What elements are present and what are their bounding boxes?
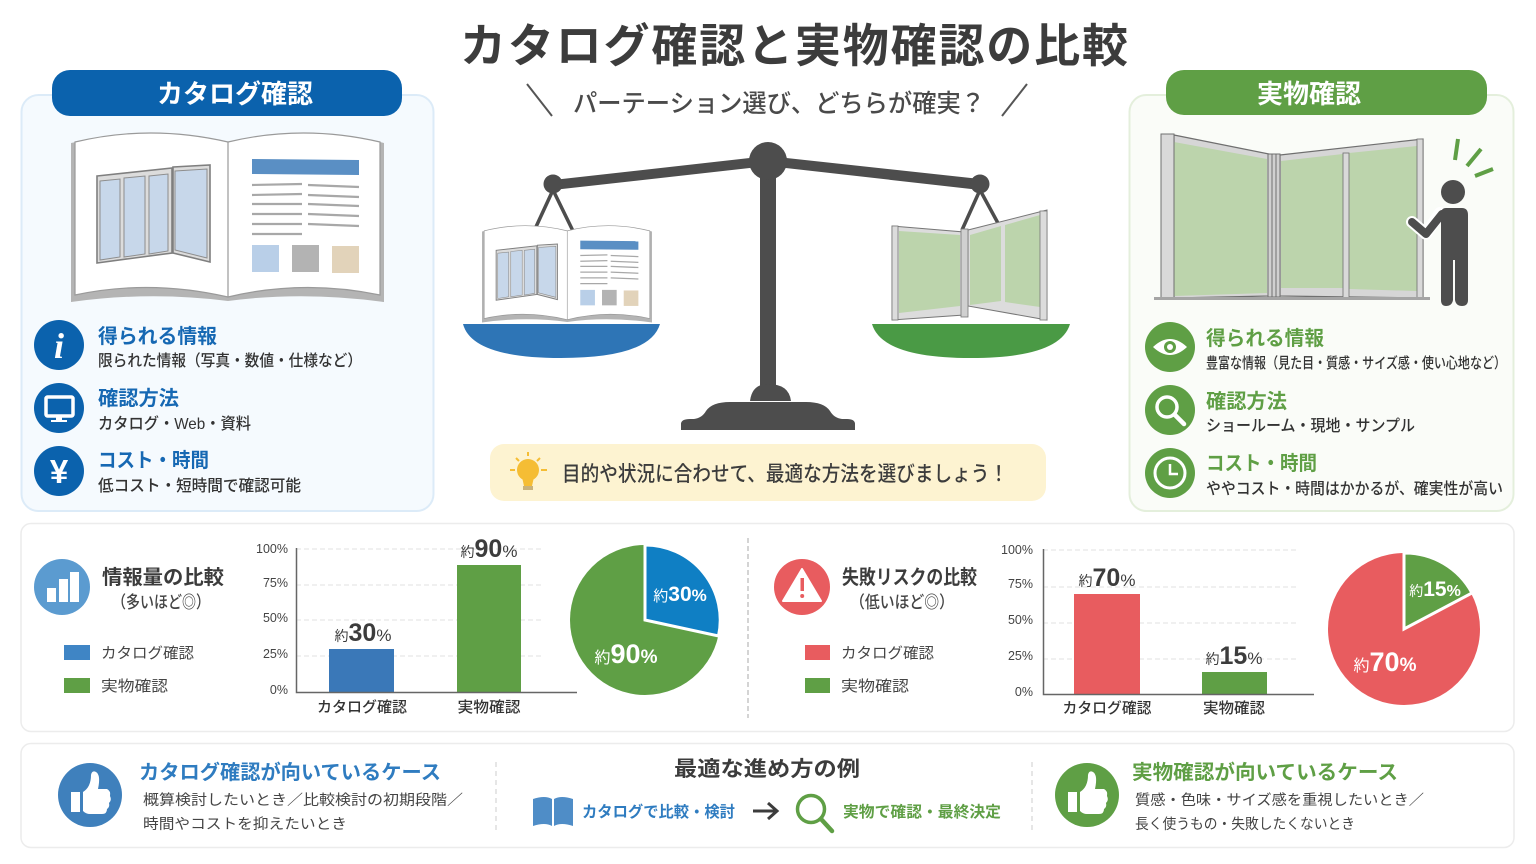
row: catalog cost: ¥: [50, 453, 69, 490]
row: physical method: ショールーム・現地・サンプル: [1206, 417, 1415, 435]
row: physical cost: コスト・時間: [1206, 452, 1317, 475]
pie chart: failure risk: 約15%: [1409, 578, 1461, 601]
bar chart: failure risk: カタログ確認: [1062, 700, 1152, 717]
subtitle with slashes: パーテーション選び、どちらが確実？: [573, 90, 985, 118]
row: catalog information: i: [54, 326, 64, 366]
bar chart: information amount: 75%: [263, 576, 288, 590]
pie chart: failure risk: [1328, 553, 1480, 705]
case: optimal process: カタログで比較・検討: [582, 802, 735, 821]
bar chart: failure risk: 実物確認: [1203, 700, 1265, 717]
heading: failure risk: （低いほど◎）: [850, 593, 954, 612]
bar chart: information amount: カタログ確認: [317, 699, 407, 716]
pie chart: information amount: 約30%: [653, 583, 707, 606]
bar chart: failure risk: 100%: [1001, 543, 1033, 557]
heading: information amount: [34, 559, 224, 615]
row: catalog method: カタログ・Web・資料: [98, 415, 251, 433]
bar chart: failure risk: [1001, 543, 1314, 717]
legend: failure risk: 実物確認: [841, 678, 909, 695]
bar chart: failure risk: 50%: [1008, 613, 1033, 627]
row: physical information: [1145, 322, 1506, 372]
panel: catalog check: [22, 70, 434, 511]
case: catalog: カタログ確認が向いているケース: [139, 760, 441, 784]
legend: information amount: カタログ確認: [101, 645, 194, 662]
tip banner: [490, 444, 1046, 501]
bar chart: failure risk: 25%: [1008, 649, 1033, 663]
bar chart: information amount: 約90%: [461, 535, 517, 563]
tip banner: 目的や状況に合わせて、最適な方法を選びましょう！: [562, 463, 1008, 486]
scale hangers: [535, 190, 999, 231]
bar chart: failure risk: 75%: [1008, 577, 1033, 591]
bar chart: failure risk: 0%: [1015, 685, 1033, 699]
case: physical: [1055, 760, 1424, 833]
case: optimal process: 最適な進め方の例: [674, 758, 860, 781]
row: physical cost: [1145, 448, 1503, 498]
case: optimal process: [533, 758, 1001, 831]
panel: comparison charts: [21, 524, 1514, 732]
bar chart: information amount: 約30%: [335, 619, 391, 647]
case: catalog: [58, 760, 463, 833]
pie chart: information amount: [570, 545, 720, 695]
left pan with catalog: [463, 226, 660, 358]
row: physical information: 得られる情報: [1206, 327, 1324, 350]
arrow: [753, 803, 777, 819]
row: catalog cost: 低コスト・短時間で確認可能: [98, 477, 301, 495]
case: catalog: 概算検討したいとき／比較検討の初期段階／: [143, 792, 463, 809]
title: カタログ確認と実物確認の比較: [460, 20, 1128, 72]
legend: failure risk: カタログ確認: [841, 645, 934, 662]
panel: recommendations: [21, 744, 1514, 848]
case: physical: 長く使うもの・失敗したくないとき: [1135, 816, 1355, 833]
bar chart: information amount: [256, 535, 577, 716]
balance scale: [463, 142, 1070, 430]
row: physical method: 確認方法: [1206, 390, 1287, 413]
heading: information amount: 情報量の比較: [102, 566, 224, 589]
icon: open book: [533, 797, 573, 826]
bar chart: information amount: 100%: [256, 542, 288, 556]
subtitle with slashes: [527, 84, 1027, 118]
icon: thumbs up blue: [58, 763, 122, 827]
row: catalog information: [34, 320, 362, 370]
bar chart: information amount: 25%: [263, 647, 288, 661]
person figure: [1412, 139, 1493, 306]
bar chart: information amount: 0%: [270, 683, 288, 697]
legend: information amount: 実物確認: [101, 678, 168, 695]
row: catalog information: 限られた情報（写真・数値・仕様など）: [98, 352, 362, 370]
row: physical cost: ややコスト・時間はかかるが、確実性が高い: [1206, 479, 1503, 498]
row: catalog cost: [34, 446, 301, 496]
row: catalog method: [34, 383, 251, 433]
case: physical: 実物確認が向いているケース: [1132, 760, 1398, 784]
scale beam and stand: [544, 142, 990, 430]
heading: failure risk: 失敗リスクの比較: [842, 566, 977, 589]
catalog book illustration: [71, 133, 384, 302]
bar chart: information amount: 実物確認: [458, 699, 520, 716]
physical header: [1166, 70, 1487, 115]
bar chart: failure risk: 約70%: [1079, 564, 1135, 592]
pie chart: information amount: 約90%: [595, 639, 658, 669]
legend: failure risk: [805, 645, 934, 695]
physical header: 実物確認: [1257, 79, 1361, 109]
row: catalog information: 得られる情報: [98, 325, 217, 348]
bar chart: information amount: 50%: [263, 611, 288, 625]
row: physical method: [1145, 385, 1415, 435]
panel: physical check: [1130, 70, 1514, 511]
partition illustration: [1154, 134, 1430, 300]
right pan with partition: [872, 210, 1070, 358]
catalog header: カタログ確認: [157, 79, 313, 109]
row: catalog method: 確認方法: [98, 387, 179, 410]
legend: information amount: [64, 645, 194, 695]
case: physical: 質感・色味・サイズ感を重視したいとき／: [1135, 791, 1424, 809]
heading: failure risk: [774, 559, 977, 615]
catalog header: [52, 70, 402, 116]
pie chart: failure risk: 約70%: [1354, 647, 1417, 677]
icon: magnifier: [798, 796, 832, 831]
icon: thumbs up green: [1055, 763, 1119, 827]
icon: light bulb: [510, 452, 547, 490]
bar chart: failure risk: 約15%: [1206, 642, 1262, 670]
case: catalog: 時間やコストを抑えたいとき: [143, 816, 347, 833]
row: catalog cost: コスト・時間: [98, 449, 209, 472]
heading: information amount: （多いほど◎）: [112, 593, 210, 612]
case: optimal process: 実物で確認・最終決定: [843, 802, 1001, 821]
